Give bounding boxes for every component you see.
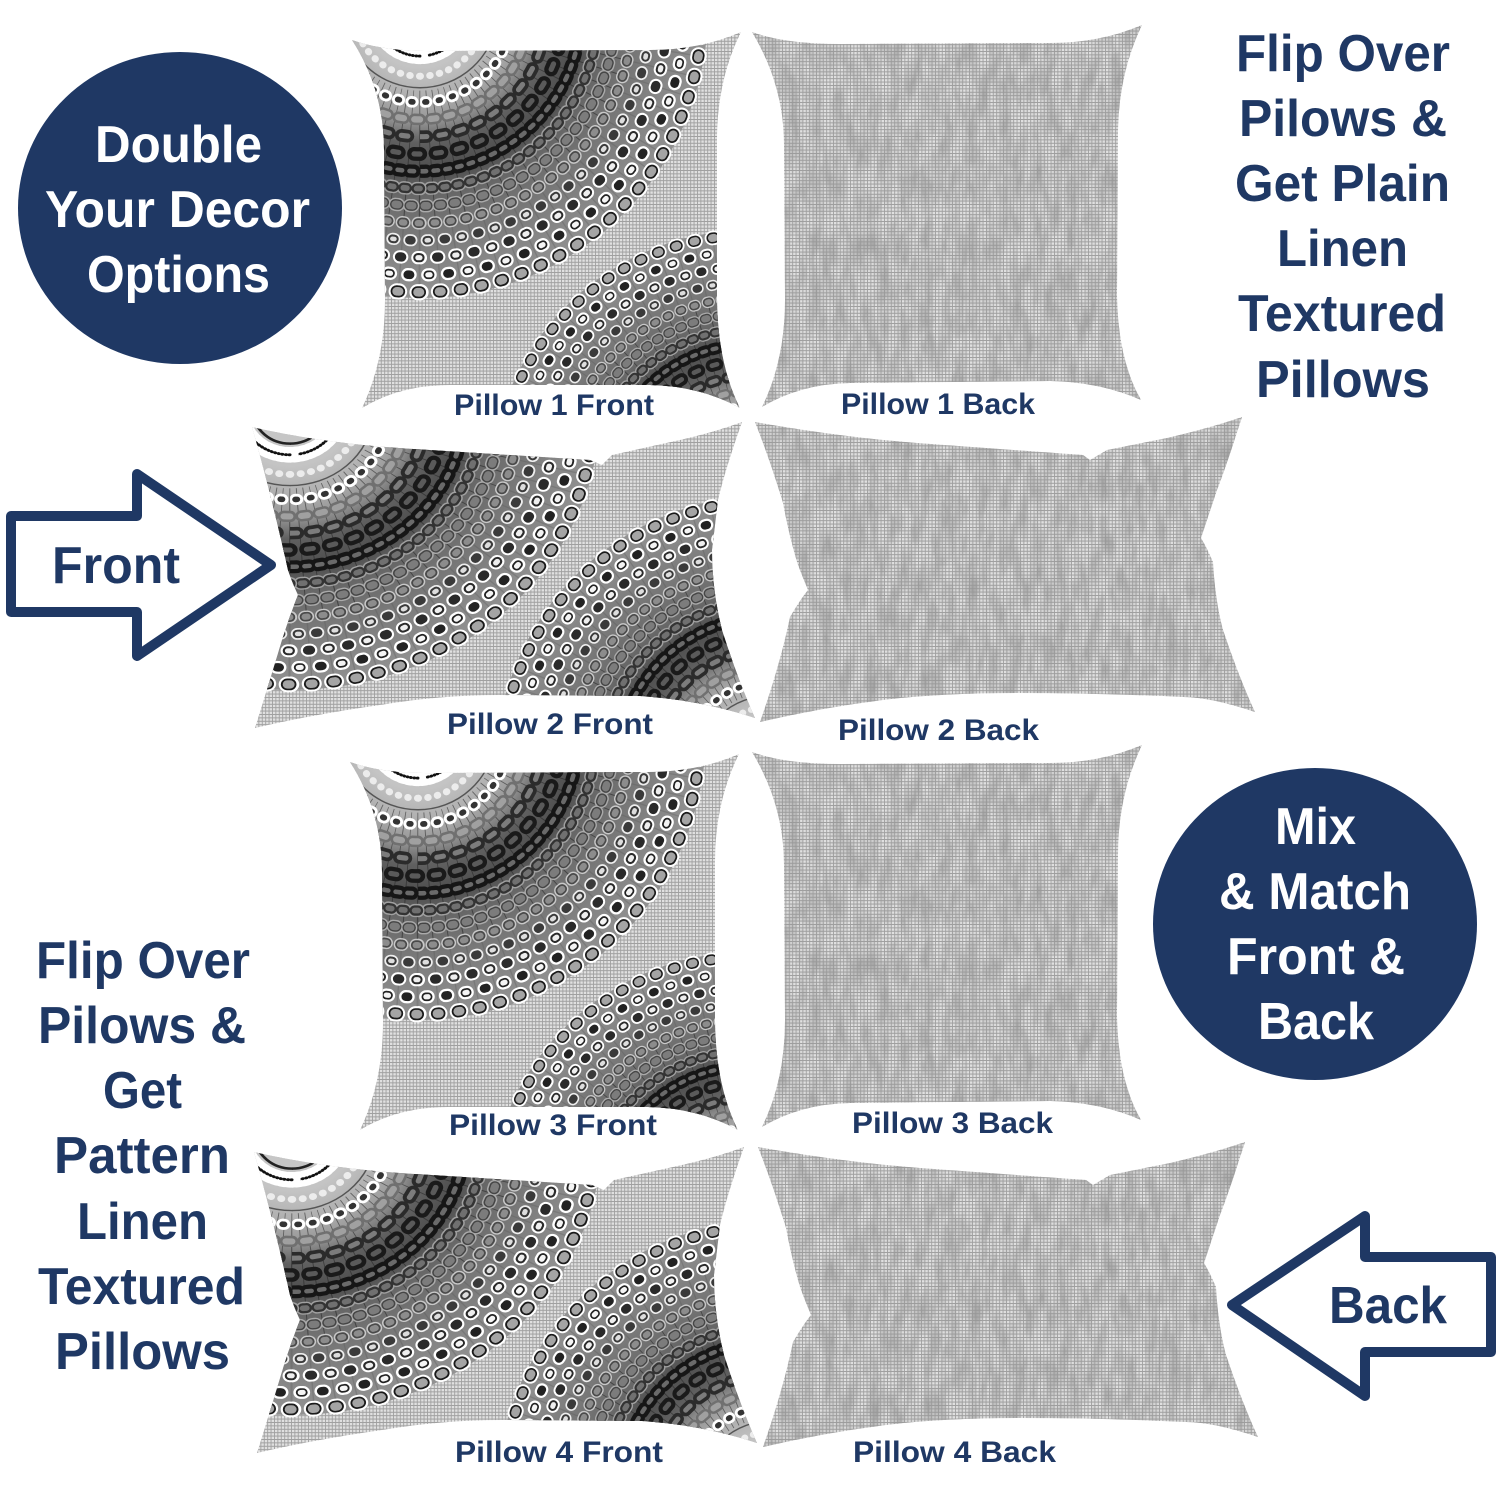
- caption: pillow 1 back: Pillow 1 Back: [841, 388, 1035, 421]
- text block: flip over for pattern linen: Textured: [38, 1258, 245, 1316]
- badge: mix and match: Front &: [1227, 928, 1405, 986]
- pillow 2 back: [752, 414, 1258, 726]
- caption: pillow 2 back: Pillow 2 Back: [838, 714, 1039, 747]
- pillow 4 front: [0, 1135, 772, 1495]
- text block: flip over for plain linen: Pillows: [1256, 351, 1430, 409]
- badge: double your decor options: Options: [87, 246, 270, 304]
- text block: flip over for plain linen: Linen: [1277, 220, 1408, 278]
- text block: flip over for plain linen: Flip Over: [1236, 25, 1450, 83]
- pillow 3 back: [748, 742, 1146, 1132]
- badge: double your decor options: [18, 52, 342, 364]
- caption: pillow 1 front: Pillow 1 Front: [454, 389, 654, 422]
- caption: pillow 3 back: Pillow 3 Back: [852, 1107, 1053, 1140]
- arrow: back: Back: [1329, 1277, 1447, 1335]
- text block: flip over for plain linen: Textured: [1238, 285, 1446, 343]
- text block: flip over for plain linen: Pilows &: [1239, 90, 1447, 148]
- badge: mix and match: & Match: [1219, 863, 1411, 921]
- text block: flip over for pattern linen: Pillows: [55, 1323, 230, 1381]
- arrow: back: [1232, 1216, 1491, 1396]
- pillow 1 front: [133, 10, 750, 490]
- pillow 1 back: [748, 22, 1146, 412]
- pillow 3 front: [131, 732, 748, 1212]
- badge: mix and match: [1153, 768, 1477, 1080]
- text block: flip over for pattern linen: Get: [103, 1062, 182, 1120]
- caption: pillow 4 back: Pillow 4 Back: [853, 1436, 1056, 1469]
- text block: flip over for pattern linen: Pilows &: [38, 997, 246, 1055]
- text block: flip over for pattern linen: [36, 932, 250, 1381]
- caption: pillow 3 front: Pillow 3 Front: [449, 1109, 657, 1142]
- text block: flip over for plain linen: [1235, 25, 1450, 409]
- badge: mix and match: Back: [1258, 993, 1374, 1051]
- caption: pillow 4 front: Pillow 4 Front: [455, 1436, 663, 1469]
- text block: flip over for plain linen: Get Plain: [1235, 155, 1450, 213]
- text block: flip over for pattern linen: Flip Over: [36, 932, 250, 990]
- arrow: front: [11, 474, 271, 656]
- pillow 2 front: [0, 410, 770, 770]
- arrow: front: Front: [52, 537, 180, 595]
- text block: flip over for pattern linen: Pattern: [54, 1127, 230, 1185]
- caption: pillow 2 front: Pillow 2 Front: [447, 708, 653, 741]
- text block: flip over for pattern linen: Linen: [77, 1193, 208, 1251]
- badge: mix and match: Mix: [1275, 798, 1356, 856]
- badge: double your decor options: Double: [95, 116, 262, 174]
- pillow 4 back: [755, 1139, 1261, 1451]
- badge: double your decor options: Your Decor: [45, 181, 310, 239]
